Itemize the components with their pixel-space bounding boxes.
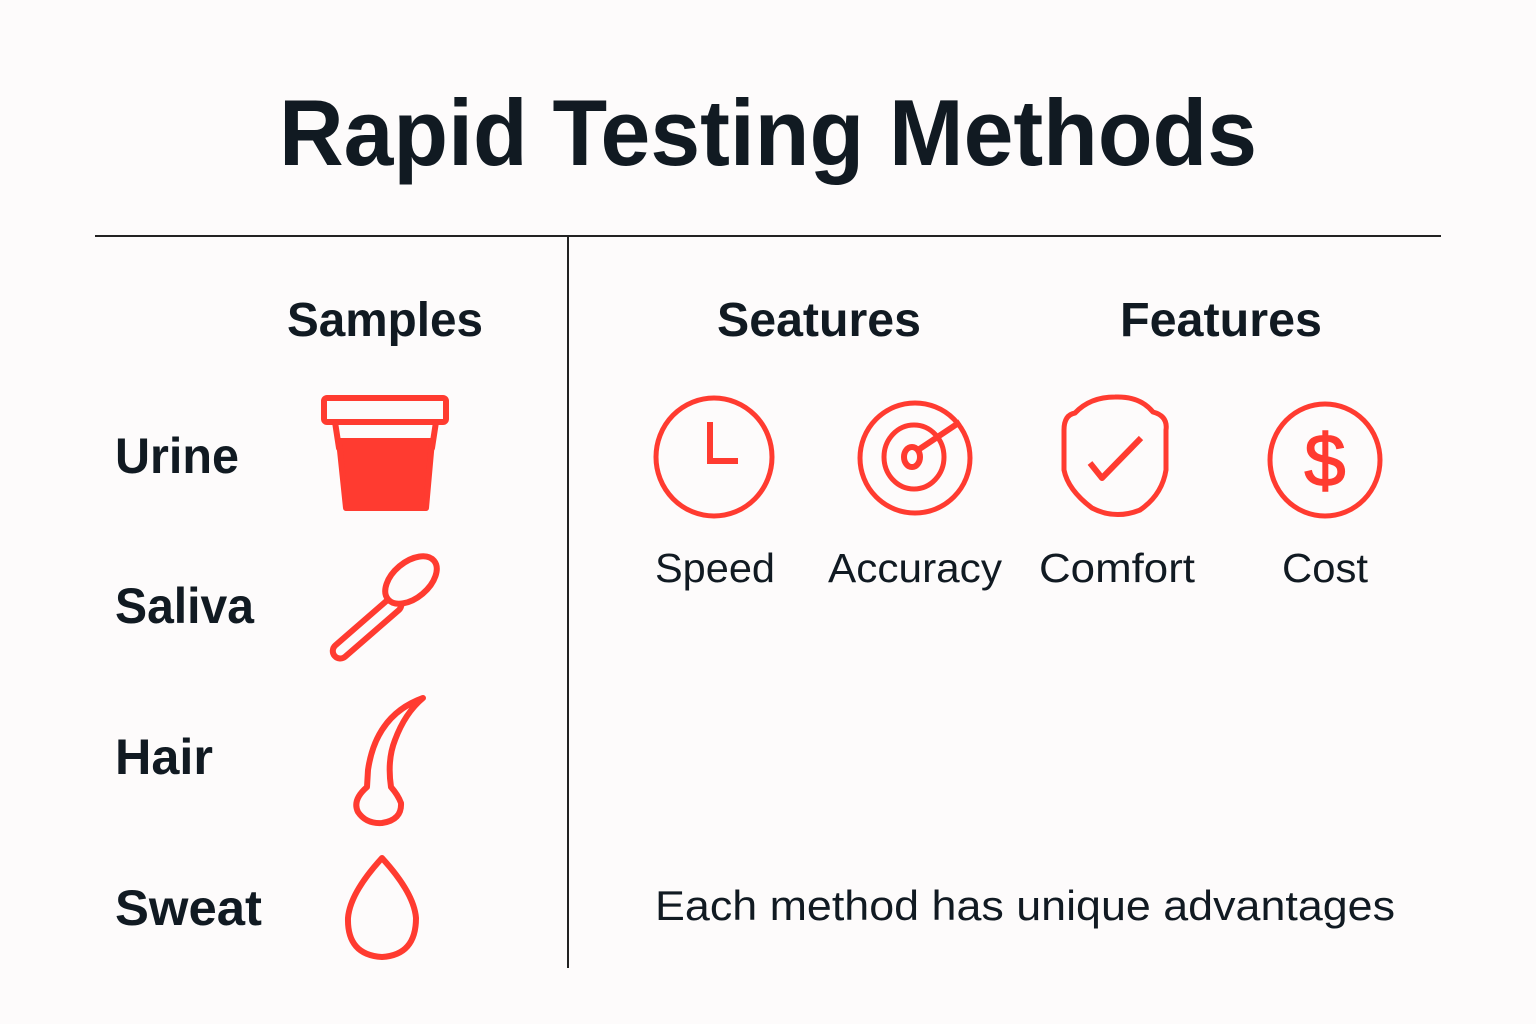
feature labels: Cost [1282, 545, 1369, 591]
sample labels [115, 428, 262, 936]
icon: target [860, 403, 970, 513]
icon: dollar [1270, 404, 1380, 516]
icon: urine cup [324, 398, 446, 508]
heading: Features: Features [1120, 294, 1322, 347]
sample labels: Urine [115, 428, 239, 484]
title: Rapid Testing Methods [279, 80, 1257, 185]
icon: saliva swab [330, 547, 446, 662]
icon: hair [356, 698, 423, 823]
feature labels: Speed [655, 545, 775, 591]
feature labels [655, 545, 1369, 591]
icon: dollar: $ [1304, 419, 1346, 502]
sample labels: Sweat [115, 880, 262, 936]
bottom caption: Each method has unique advantages [655, 882, 1395, 929]
feature labels: Accuracy [828, 545, 1003, 591]
icon: sweat drop [348, 858, 416, 957]
feature labels: Comfort [1039, 545, 1196, 591]
sample labels: Hair [115, 729, 213, 785]
icon: clock [656, 398, 772, 516]
icon: shield [1064, 397, 1166, 515]
sample labels: Saliva [115, 578, 255, 634]
heading: Seatures: Seatures [717, 294, 921, 347]
heading: Samples: Samples [287, 294, 483, 347]
